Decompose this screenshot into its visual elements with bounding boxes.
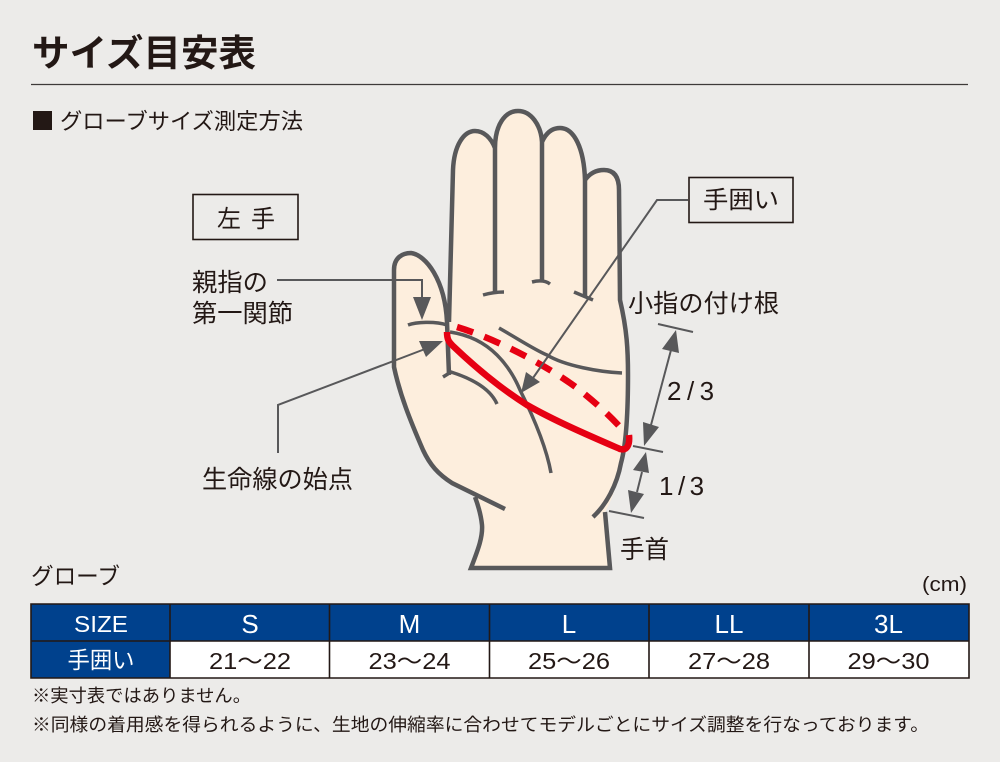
header row: M [399, 609, 420, 639]
size table [31, 604, 969, 678]
dimension: 1/3 [609, 452, 649, 518]
unit label: (cm) [922, 574, 967, 596]
header row [74, 609, 903, 639]
circumference row: 25～26 [528, 648, 610, 674]
red measuring line: hand circumference [447, 332, 629, 449]
label: 1/3: 1/3 [659, 471, 709, 501]
header row: LL [715, 609, 743, 639]
hand illustration [277, 111, 693, 568]
label: wrist: 手首 [620, 536, 669, 564]
label: start of life line: 生命線の始点 [202, 466, 353, 494]
circumference row: 23～24 [368, 648, 451, 674]
footnote 2: ※同様の着用感を得られるように、生地の伸縮率に合わせてモデルごとにサイズ調整を行なっております。 [32, 715, 929, 735]
label: base of little finger: 小指の付け根 [628, 290, 779, 318]
circumference row: 27～28 [688, 648, 770, 674]
section heading: glove size measuring method: グローブサイズ測定方法 [60, 109, 303, 134]
label: thumb first joint: 第一関節 [192, 300, 293, 328]
dimension: 2/3 [633, 324, 693, 452]
circumference row: 29～30 [848, 648, 930, 674]
header row: 3L [874, 609, 903, 639]
header row: L [562, 609, 576, 639]
circumference row: 21～22 [209, 648, 291, 674]
title: サイズ目安表 [32, 33, 256, 74]
circumference row: 手囲い [68, 647, 134, 673]
label box: left hand: 左 手 [217, 206, 275, 233]
label box: hand circumference [689, 178, 793, 222]
red dashed measuring line [457, 327, 621, 428]
palm creases [408, 281, 622, 473]
header row: S [241, 609, 259, 639]
callout arrow: start of life line [278, 341, 443, 453]
circumference row [68, 647, 930, 674]
callout arrow: hand circumference [521, 200, 688, 393]
table heading: glove: グローブ [31, 563, 120, 589]
hand outline [394, 111, 628, 568]
label box: hand circumference: 手囲い [703, 187, 779, 214]
label: thumb first joint [192, 269, 293, 328]
label box: left hand [193, 194, 298, 240]
header row: SIZE [74, 611, 128, 637]
footnote 1: ※実寸表ではありません。 [32, 686, 251, 706]
callout arrow: thumb first joint [277, 280, 431, 320]
label: 2/3: 2/3 [667, 376, 720, 406]
label: thumb first joint: 親指の [192, 269, 268, 297]
